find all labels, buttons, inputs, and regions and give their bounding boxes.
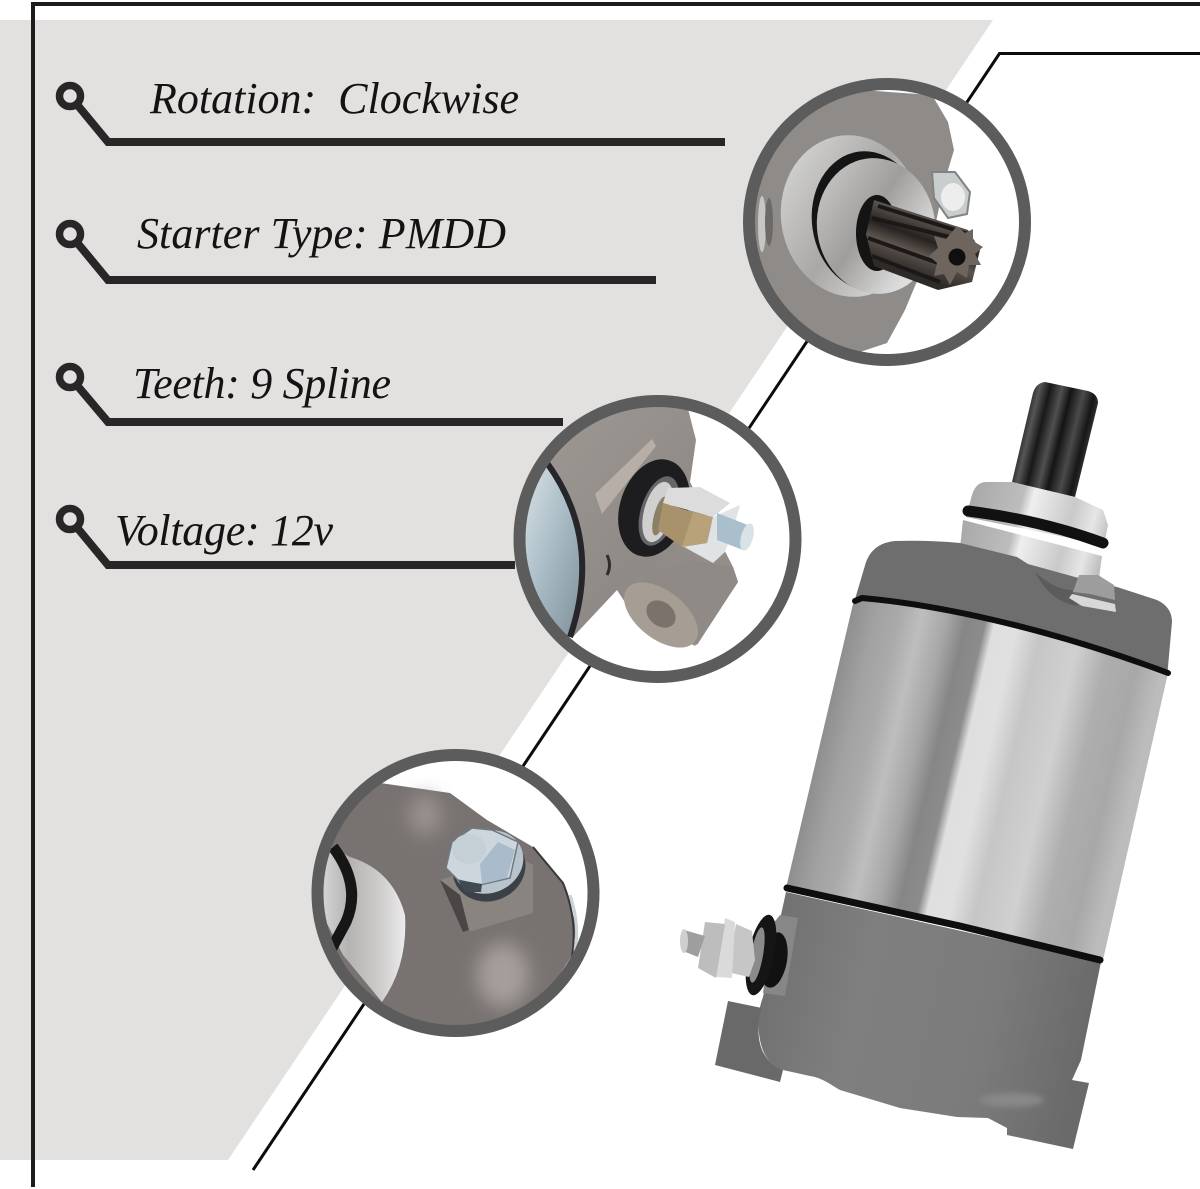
spec: rotation: Rotation: Clockwise — [149, 74, 519, 123]
shaft — [1012, 382, 1098, 497]
boss with mounting hole — [624, 567, 738, 648]
cap bolt — [1069, 575, 1116, 612]
detail circle: pinion gear — [740, 84, 1025, 360]
detail circle: mounting bolt — [310, 755, 594, 1040]
spec: teeth: Teeth: 9 Spline — [133, 359, 391, 408]
grey background panel — [0, 20, 993, 1160]
bolt — [932, 172, 970, 218]
detail circle: terminal stud — [520, 400, 796, 677]
spec: starter type — [60, 209, 656, 280]
upper end cap — [853, 541, 1172, 678]
flange bolt — [446, 828, 526, 902]
spec: voltage — [60, 506, 515, 565]
spec: teeth — [60, 359, 563, 422]
body cylinder — [786, 599, 1168, 960]
lower seam ring — [787, 888, 1100, 960]
pinion gear face — [929, 226, 983, 285]
stud and nuts — [642, 482, 754, 563]
chrome body section — [324, 844, 406, 1002]
terminal stud — [680, 912, 792, 998]
spec: voltage: Voltage: 12v — [115, 506, 333, 555]
spec: rotation — [60, 74, 725, 142]
lower collar — [960, 520, 1102, 585]
left mounting foot — [715, 1001, 783, 1082]
lower housing — [758, 892, 1101, 1149]
o-ring — [968, 511, 1103, 543]
diagonal connector line — [253, 54, 1200, 1170]
bolt boss — [440, 855, 533, 931]
starter motor photo illustration — [680, 382, 1172, 1149]
spec: starter type: Starter Type: PMDD — [137, 209, 506, 258]
upper seam ring — [855, 598, 1168, 673]
upper collar — [966, 482, 1108, 545]
terminal bracket — [763, 915, 798, 996]
